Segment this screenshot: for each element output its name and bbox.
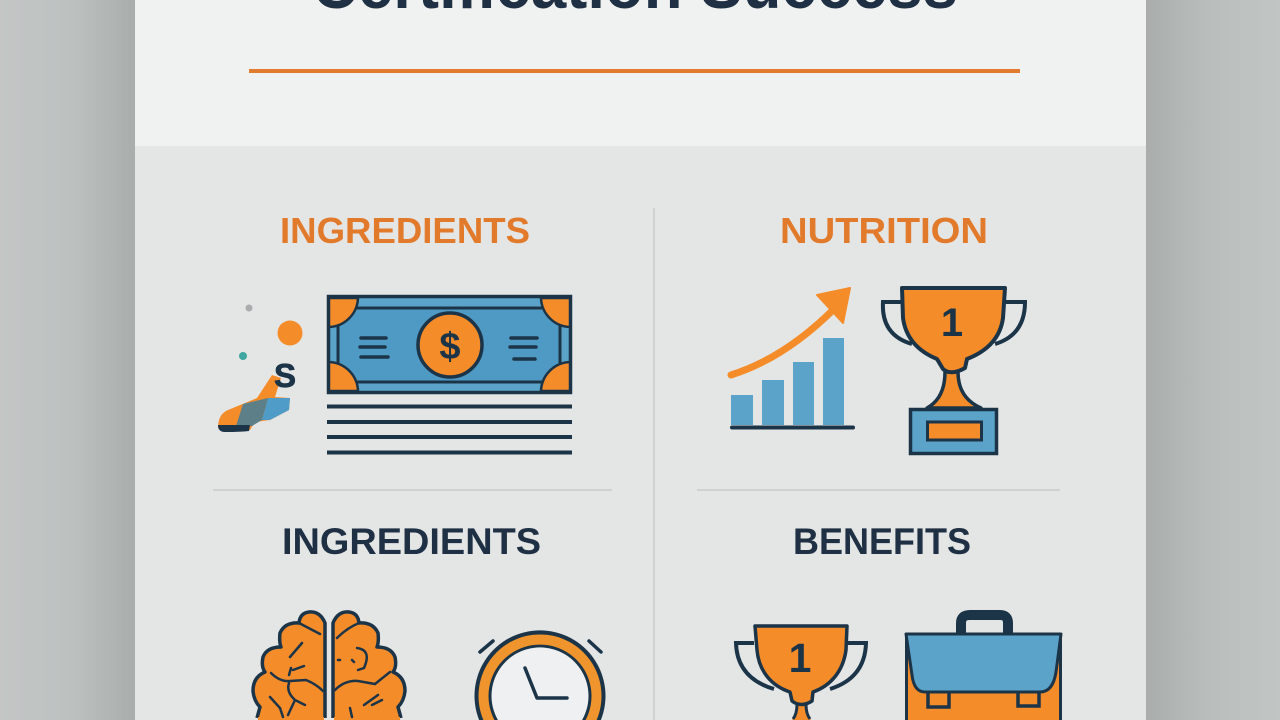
icon: trophy with base: 1 <box>941 301 963 345</box>
icon: briefcase <box>905 615 1062 720</box>
icon: hand with coins: S <box>274 357 296 394</box>
title underline <box>249 69 1020 73</box>
icon: hand with coins <box>218 304 302 432</box>
icon: banknote <box>327 296 572 452</box>
icon: trophy with base <box>883 288 1025 454</box>
heading: nutrition: NUTRITION <box>780 210 988 251</box>
icon: clock <box>474 630 606 720</box>
icon: banknote: $ <box>439 326 461 368</box>
icon: brain <box>253 612 405 720</box>
panel: header <box>135 0 1146 146</box>
heading: ingredients dark: INGREDIENTS <box>282 521 541 562</box>
icon: trophy small: 1 <box>789 635 811 681</box>
heading: benefits: BENEFITS <box>793 521 971 562</box>
heading: ingredients orange: INGREDIENTS <box>280 210 530 251</box>
chart: rising bars with arrow <box>730 288 855 430</box>
icon: trophy small <box>736 626 866 720</box>
panel: content <box>135 146 1146 720</box>
